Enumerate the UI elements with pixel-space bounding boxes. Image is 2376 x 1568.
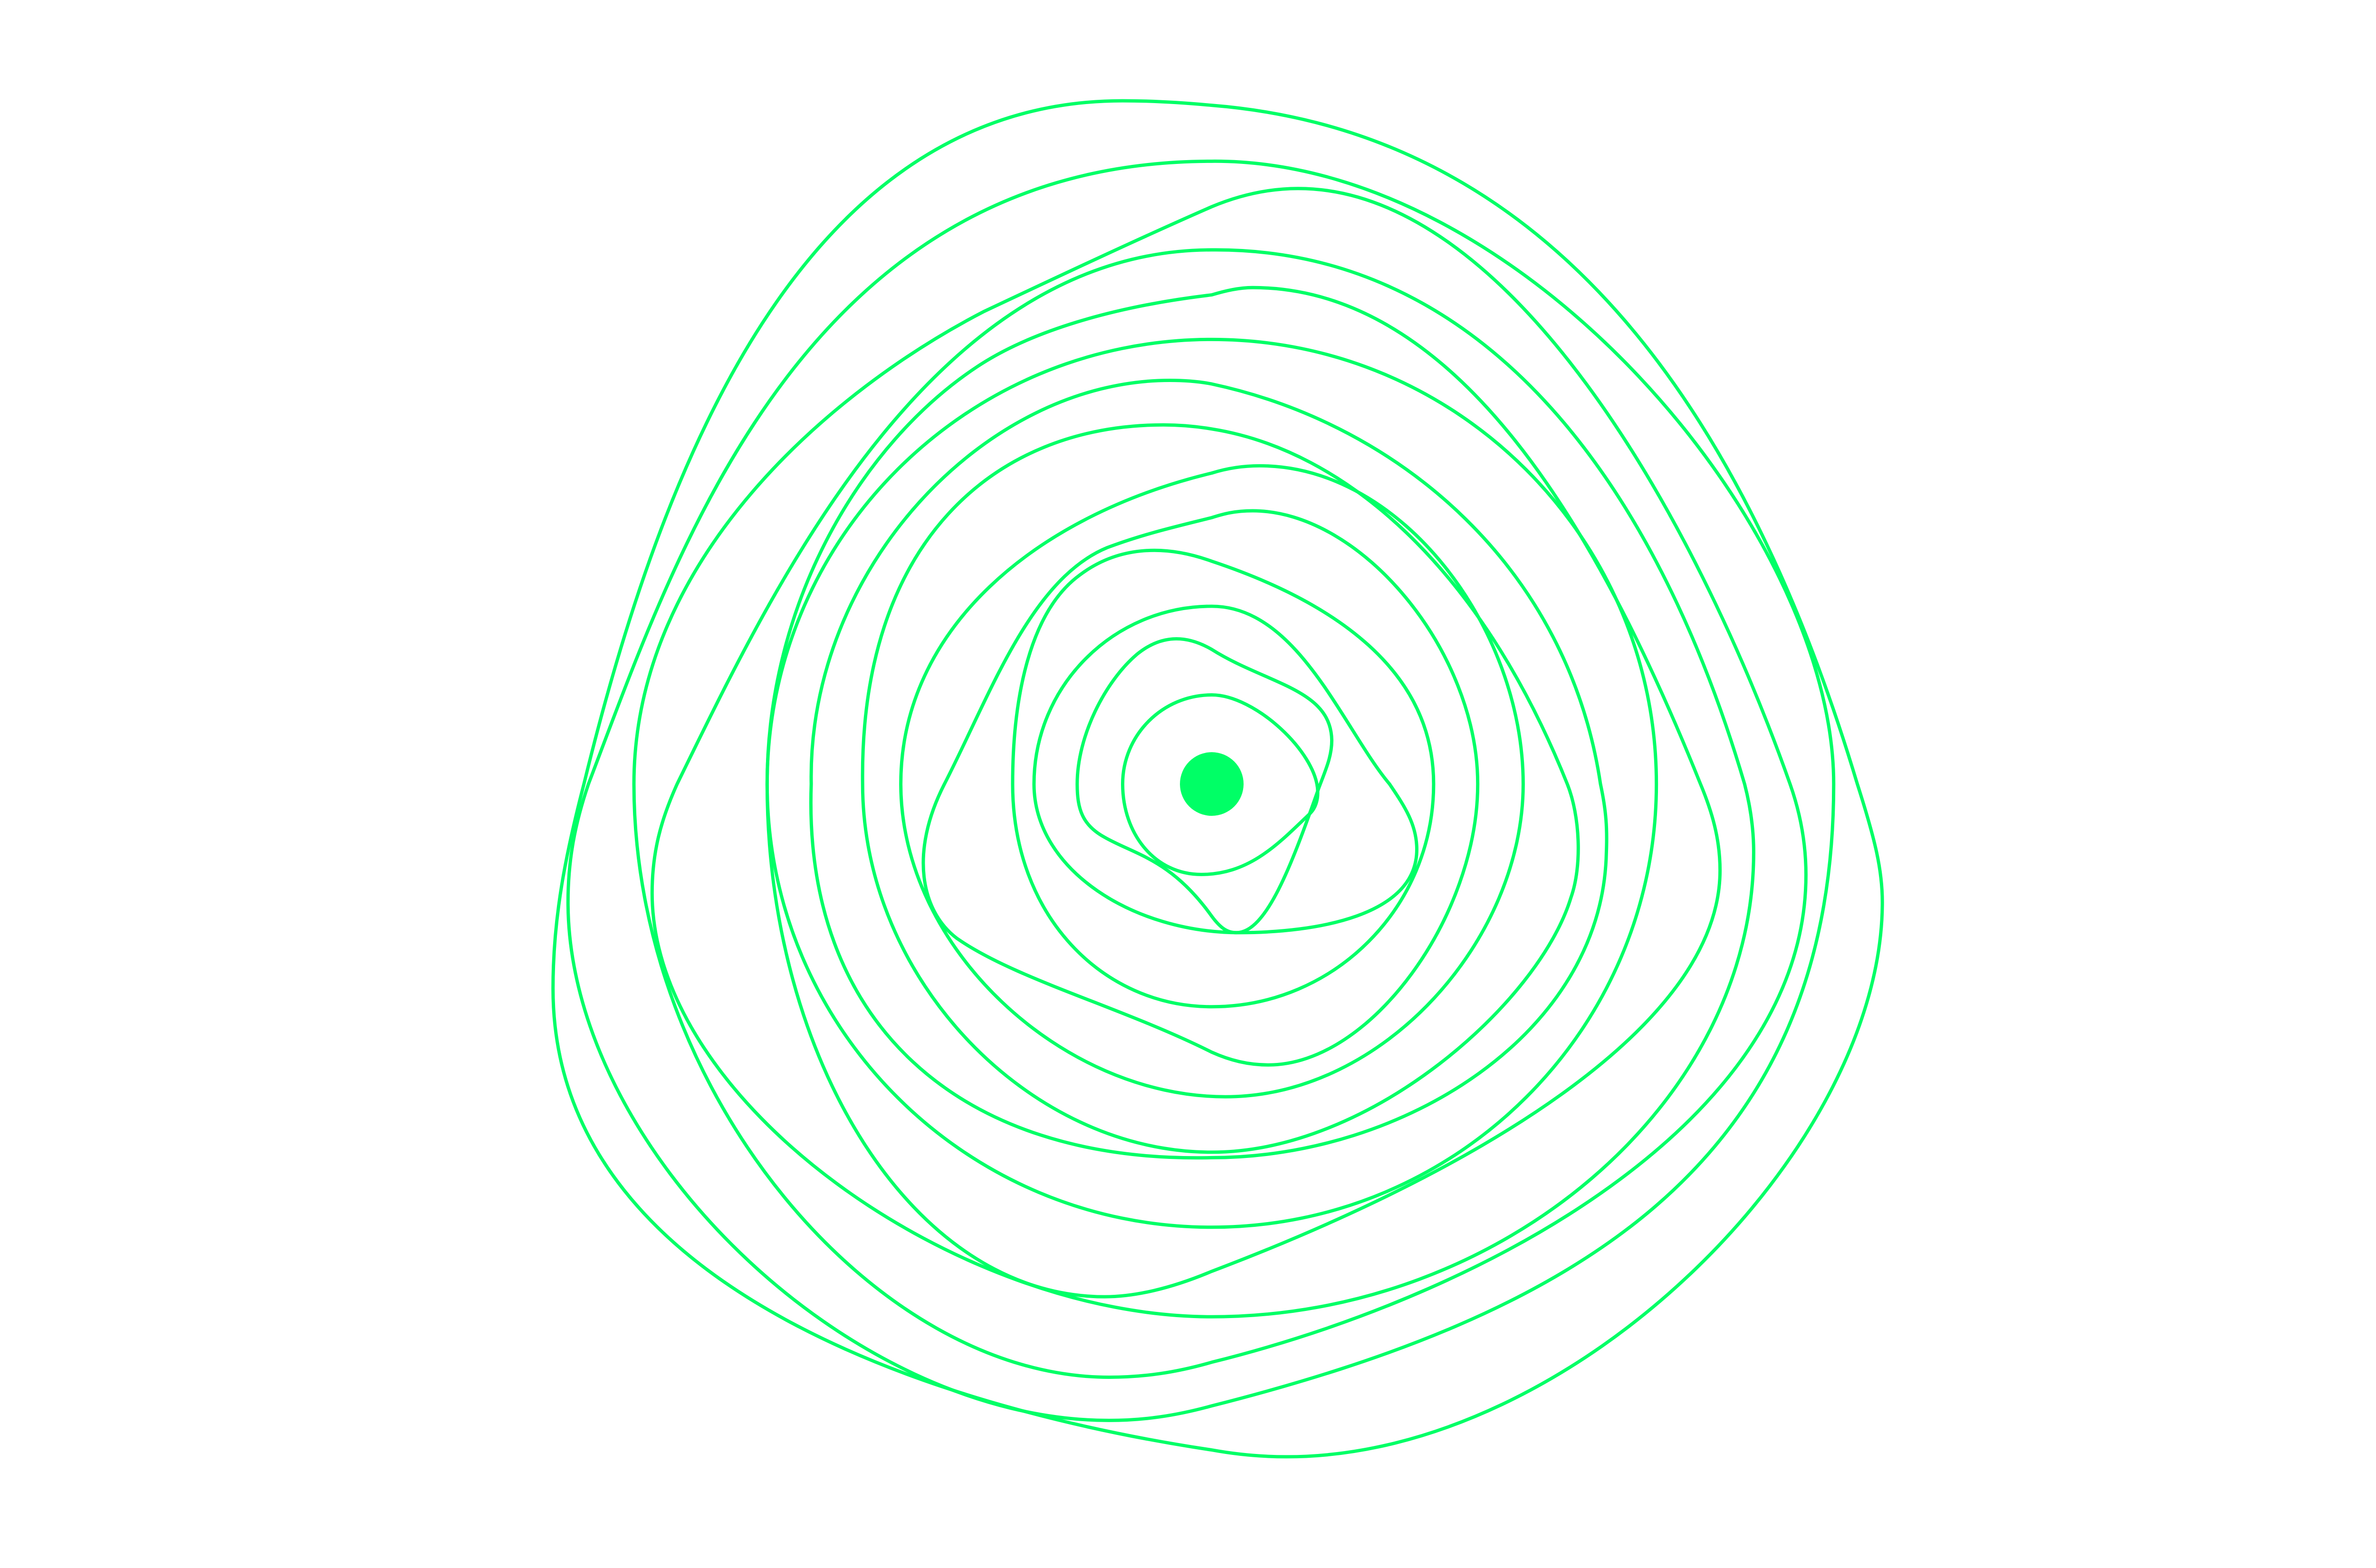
ring 14: outermost	[553, 101, 1882, 1457]
ring 9	[767, 339, 1657, 1227]
ring 13	[568, 161, 1834, 1420]
ring 10	[767, 287, 1720, 1297]
ring 1: innermost	[1122, 695, 1318, 874]
ring 6	[901, 466, 1523, 1097]
ring 7	[862, 425, 1578, 1152]
ring 11	[652, 250, 1753, 1317]
ring 4	[1013, 550, 1434, 1007]
center dot	[1180, 752, 1244, 816]
ring 3	[1034, 606, 1417, 933]
ring 8	[811, 380, 1607, 1158]
ring 5	[923, 511, 1478, 1065]
ring 2	[1077, 639, 1332, 933]
ring 12	[634, 189, 1806, 1377]
